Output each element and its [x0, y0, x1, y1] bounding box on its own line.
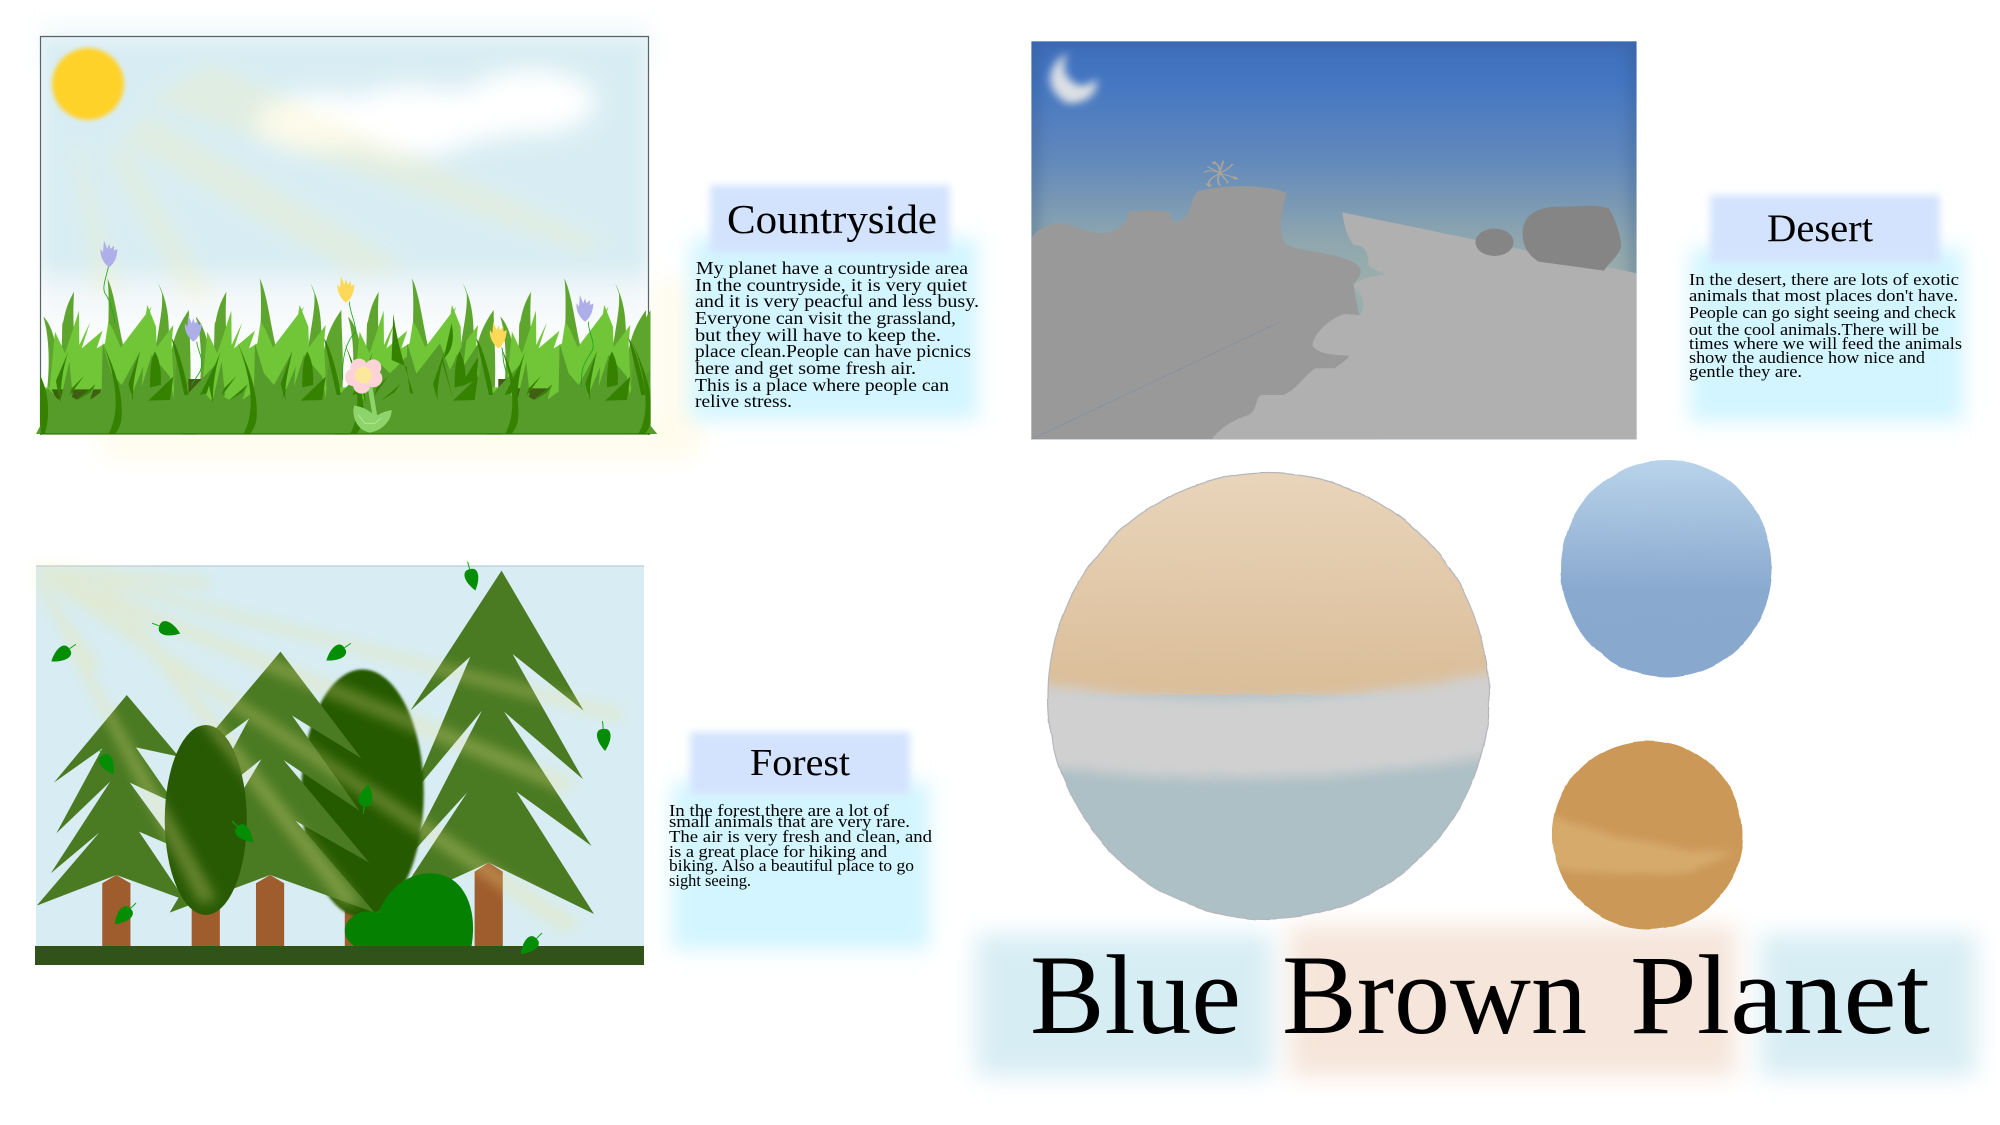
body text: sight seeing. — [669, 871, 751, 890]
body text: animals that most places don't have. — [1689, 286, 1958, 305]
light sand dune — [1212, 212, 1637, 439]
soft glow around countryside scene — [40, 26, 700, 460]
title: Brown — [1282, 933, 1587, 1058]
heading background — [710, 185, 950, 253]
body text: biking. Also a beautiful place to go — [669, 856, 914, 875]
text background — [690, 238, 978, 420]
dark grass blades — [40, 313, 672, 434]
tree: centre pine — [170, 652, 375, 913]
icons: purple and yellow flowers — [100, 241, 593, 387]
body text: The air is very fresh and clean, and — [669, 827, 933, 846]
panel: forest text — [669, 732, 933, 950]
grass — [30, 241, 672, 435]
night sky — [1031, 41, 1637, 439]
title background — [976, 926, 1976, 1076]
tree: left pine — [37, 695, 185, 906]
body text — [1689, 270, 1962, 381]
body text: times where we will feed the animals — [1689, 334, 1962, 353]
text background — [1690, 248, 1964, 422]
body text: In the desert, there are lots of exotic — [1689, 270, 1959, 289]
dark soil strip — [52, 379, 548, 400]
tree: large right pine — [392, 571, 594, 914]
sun rays — [74, 63, 602, 300]
big planet — [1030, 470, 1500, 919]
body text: out the cool animals.There will be — [1689, 320, 1939, 339]
body text: place clean.People can have picnics — [695, 341, 971, 361]
body text: In the countryside, it is very quiet — [695, 275, 967, 295]
icon: small spiky plant — [1204, 161, 1237, 187]
frame lines — [40, 36, 648, 435]
heading background — [1710, 195, 1940, 263]
icon: pink flower — [345, 359, 392, 433]
body text: gentle they are. — [1689, 362, 1802, 381]
sky edge vignette — [1032, 42, 1636, 274]
dark rock formation — [1031, 186, 1382, 439]
body text: small animals that are very rare. — [669, 812, 910, 831]
cloud — [255, 70, 595, 158]
body text: Everyone can visit the grassland, — [695, 308, 956, 328]
heading: Desert: Desert — [1767, 207, 1873, 250]
back grass layer — [40, 278, 651, 402]
orange planet — [1550, 740, 1742, 930]
panel: forest scene — [35, 560, 644, 965]
sky — [40, 36, 649, 435]
heading: Forest: Forest — [750, 742, 850, 784]
sun rays — [36, 564, 625, 932]
title — [1030, 933, 1930, 1058]
body text: In the forest there are a lot of — [669, 801, 889, 820]
ground — [30, 337, 672, 435]
text background — [672, 782, 930, 950]
tree: dark oval behind — [301, 669, 424, 917]
title: Planet — [1630, 933, 1930, 1058]
title block — [976, 926, 1976, 1076]
small boulder — [1475, 229, 1514, 256]
body text: This is a place where people can — [695, 375, 949, 395]
body text: relive stress. — [695, 391, 792, 411]
blue planet — [1561, 460, 1772, 677]
ground — [35, 946, 644, 965]
body text: but they will have to keep the. — [695, 325, 941, 345]
heading: Countryside: Countryside — [727, 196, 937, 242]
bushes — [345, 873, 473, 950]
bottom corner tips — [36, 425, 657, 434]
panel: desert scene — [1031, 41, 1637, 439]
panel: countryside text — [690, 185, 979, 420]
body text: My planet have a countryside area — [696, 258, 968, 278]
panel: countryside scene — [30, 26, 700, 460]
body text: show the audience how nice and — [1689, 348, 1926, 367]
body text: People can go sight seeing and check — [1689, 303, 1957, 322]
inner edge fade — [41, 37, 648, 269]
sky — [36, 566, 644, 946]
title: Blue — [1030, 933, 1241, 1058]
body text: and it is very peacful and less busy. — [695, 291, 979, 311]
tree: dark oval front — [165, 725, 247, 915]
heading background — [690, 732, 910, 794]
body text — [695, 258, 979, 411]
icon: crescent moon — [1050, 52, 1096, 103]
body text: is a great place for hiking and — [669, 842, 888, 861]
large boulder — [1523, 206, 1621, 271]
icons: falling leaves — [47, 560, 612, 959]
sun — [52, 48, 124, 120]
panel: desert text — [1689, 195, 1964, 422]
body text: here and get some fresh air. — [695, 358, 916, 378]
body text — [669, 801, 933, 890]
tree trunks — [102, 863, 503, 946]
